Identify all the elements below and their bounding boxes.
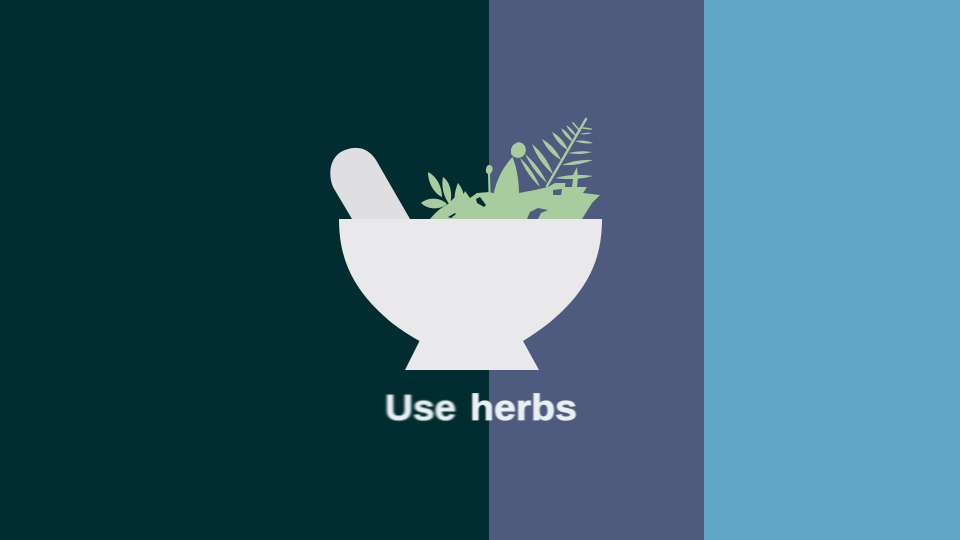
herb: compound leaf upper leaflet (428, 172, 442, 197)
title: Use herbs (385, 387, 577, 428)
herb: round seed head (511, 142, 526, 158)
herb: large pointed leaf (493, 157, 519, 215)
panel: slate blue background column (489, 0, 704, 540)
icon: mortar bowl (339, 219, 602, 370)
herb: fern frond (520, 119, 593, 187)
herb: gaps in foliage on slate (527, 179, 573, 219)
icon: herbs (421, 119, 600, 219)
herb: small bud with stem (486, 165, 493, 193)
word: herbs: herbs (470, 387, 577, 428)
icon: pestle (330, 148, 410, 219)
herb: gaps in foliage on dark (448, 197, 486, 218)
herb: compound leaf lower leaflet (421, 199, 447, 208)
word: Use: Use (385, 387, 456, 428)
panel: light blue background column (704, 0, 960, 540)
panel: dark green background column (0, 0, 489, 540)
herb: compound leaf right leaflet (454, 183, 464, 212)
herb: maple foliage mass (430, 167, 600, 219)
herb: compound leaf middle leaflet (442, 177, 451, 205)
